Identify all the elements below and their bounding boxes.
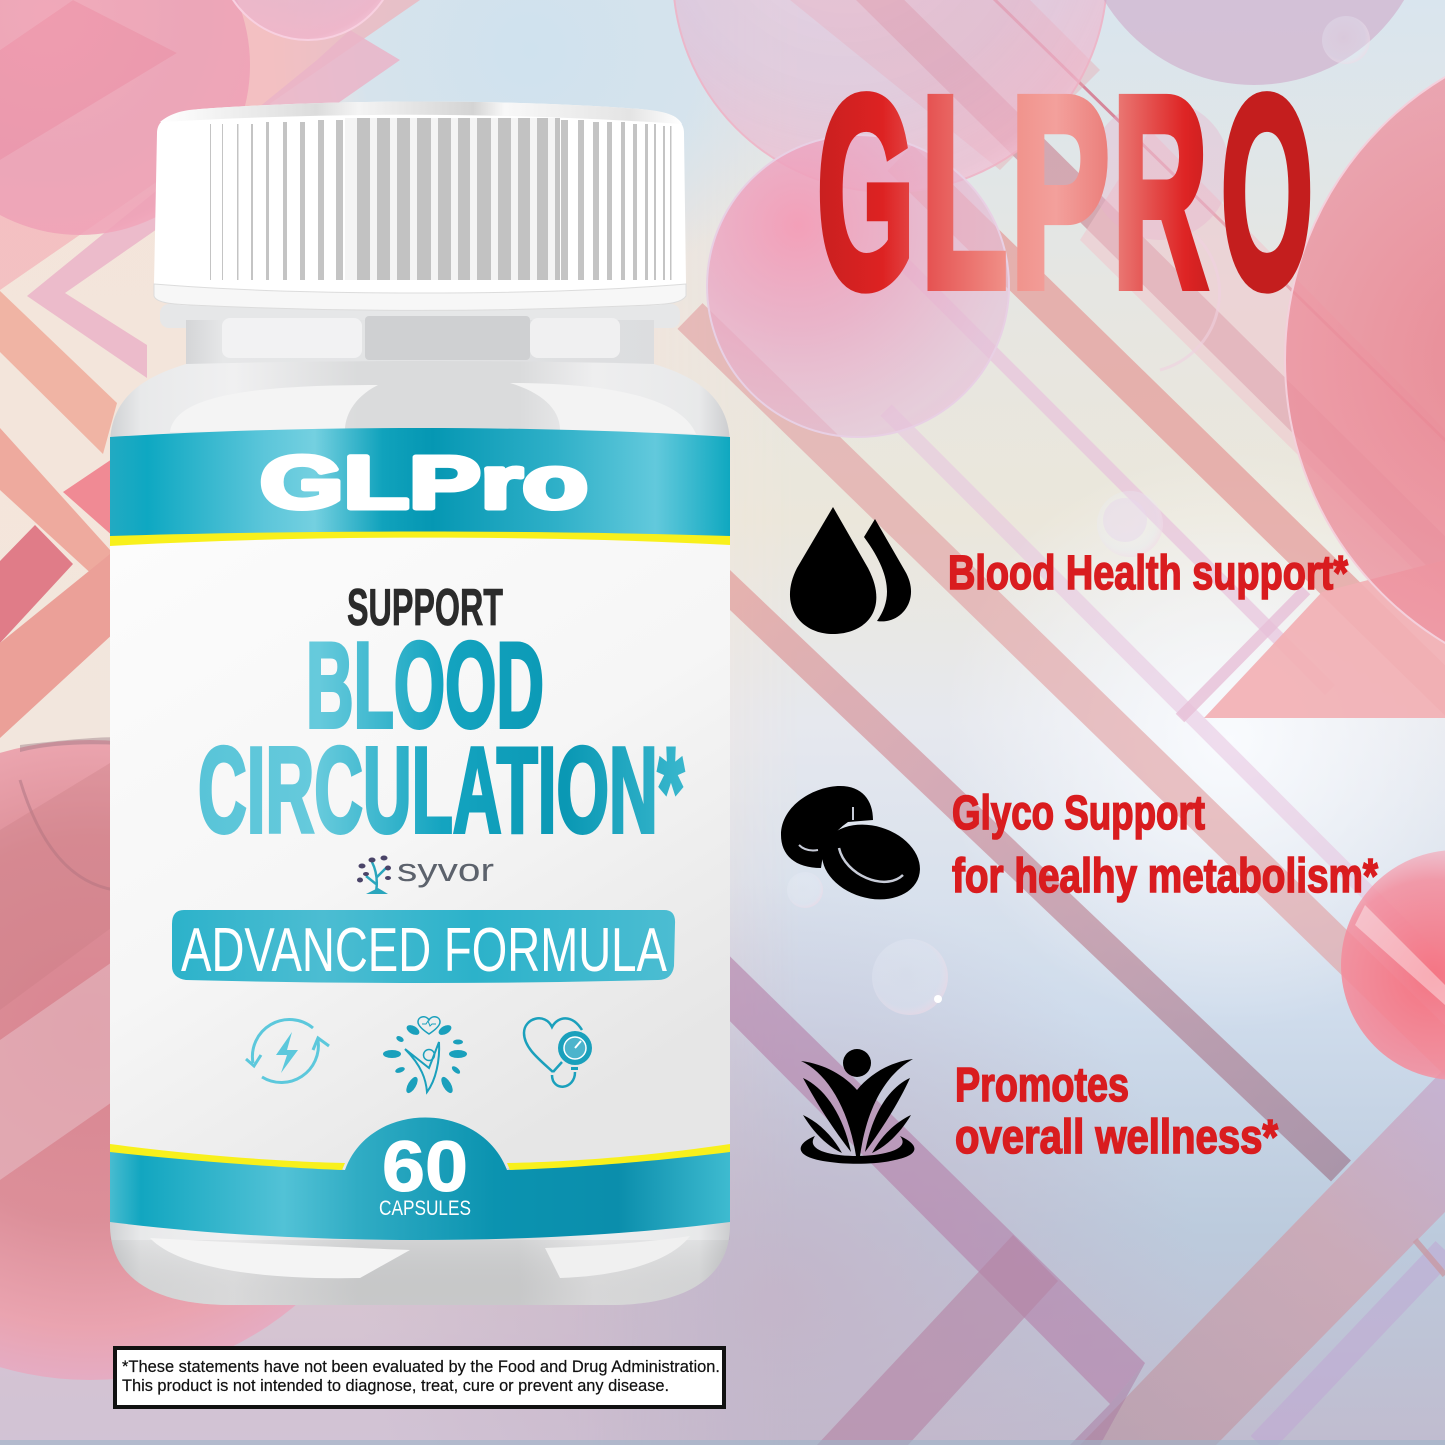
- capsule count: CAPSULES: [379, 1197, 471, 1220]
- text: O: [1221, 40, 1313, 344]
- title: [817, 40, 1313, 344]
- advanced formula pill: [172, 910, 675, 985]
- benefit: glyco support: [952, 787, 1378, 903]
- syvor logo: syvor: [397, 852, 494, 888]
- circulation heading: CIRCULATION*: [198, 722, 684, 858]
- benefit: promotes wellness: Promotes: [955, 1059, 1129, 1112]
- icon: blood drops: [790, 507, 911, 634]
- benefit: glyco support: Glyco Support: [952, 787, 1205, 840]
- label white area: [110, 536, 730, 1170]
- icon: wellness figure: [383, 1017, 467, 1095]
- triangle panel: [1204, 560, 1445, 718]
- bottle body: [110, 361, 730, 1305]
- title: G: [817, 40, 914, 344]
- benefit: blood health: Blood Health support*: [948, 547, 1348, 600]
- bottom teal band: [110, 1118, 730, 1240]
- upper right bands: [860, 0, 1445, 580]
- bottle cap: [154, 102, 686, 310]
- capsule count: 60: [382, 1128, 468, 1207]
- disclaimer box: [115, 1348, 724, 1407]
- bottle neck: [160, 304, 680, 375]
- left chevrons: [0, 0, 177, 160]
- icon: heart blood pressure: [524, 1018, 592, 1087]
- middle bands: [690, 316, 1445, 1070]
- disclaimer box: This product is not intended to diagnose, treat, cure or prevent any disease.: [122, 1377, 669, 1395]
- disclaimer box: *These statements have not been evaluated by the Food and Drug Administration.: [122, 1358, 720, 1376]
- product bottle: [110, 102, 730, 1305]
- top teal band: [110, 428, 730, 540]
- icon: wellness person: [801, 1049, 914, 1164]
- title: P: [1010, 40, 1110, 344]
- icon: energy cycle: [246, 1020, 329, 1083]
- advanced formula pill: ADVANCED FORMULA: [181, 916, 667, 985]
- benefit: promotes wellness: [955, 1059, 1278, 1164]
- syvor logo: [357, 852, 494, 894]
- icon: blood cells: [781, 786, 929, 911]
- title: R: [1112, 40, 1208, 344]
- title: L: [921, 40, 1008, 344]
- brand name: GLPro: [260, 441, 588, 524]
- support heading: SUPPORT: [347, 579, 503, 637]
- benefit: promotes wellness: overall wellness*: [955, 1111, 1278, 1164]
- blood heading: BLOOD: [306, 617, 544, 753]
- lower bands: [1080, 1068, 1445, 1445]
